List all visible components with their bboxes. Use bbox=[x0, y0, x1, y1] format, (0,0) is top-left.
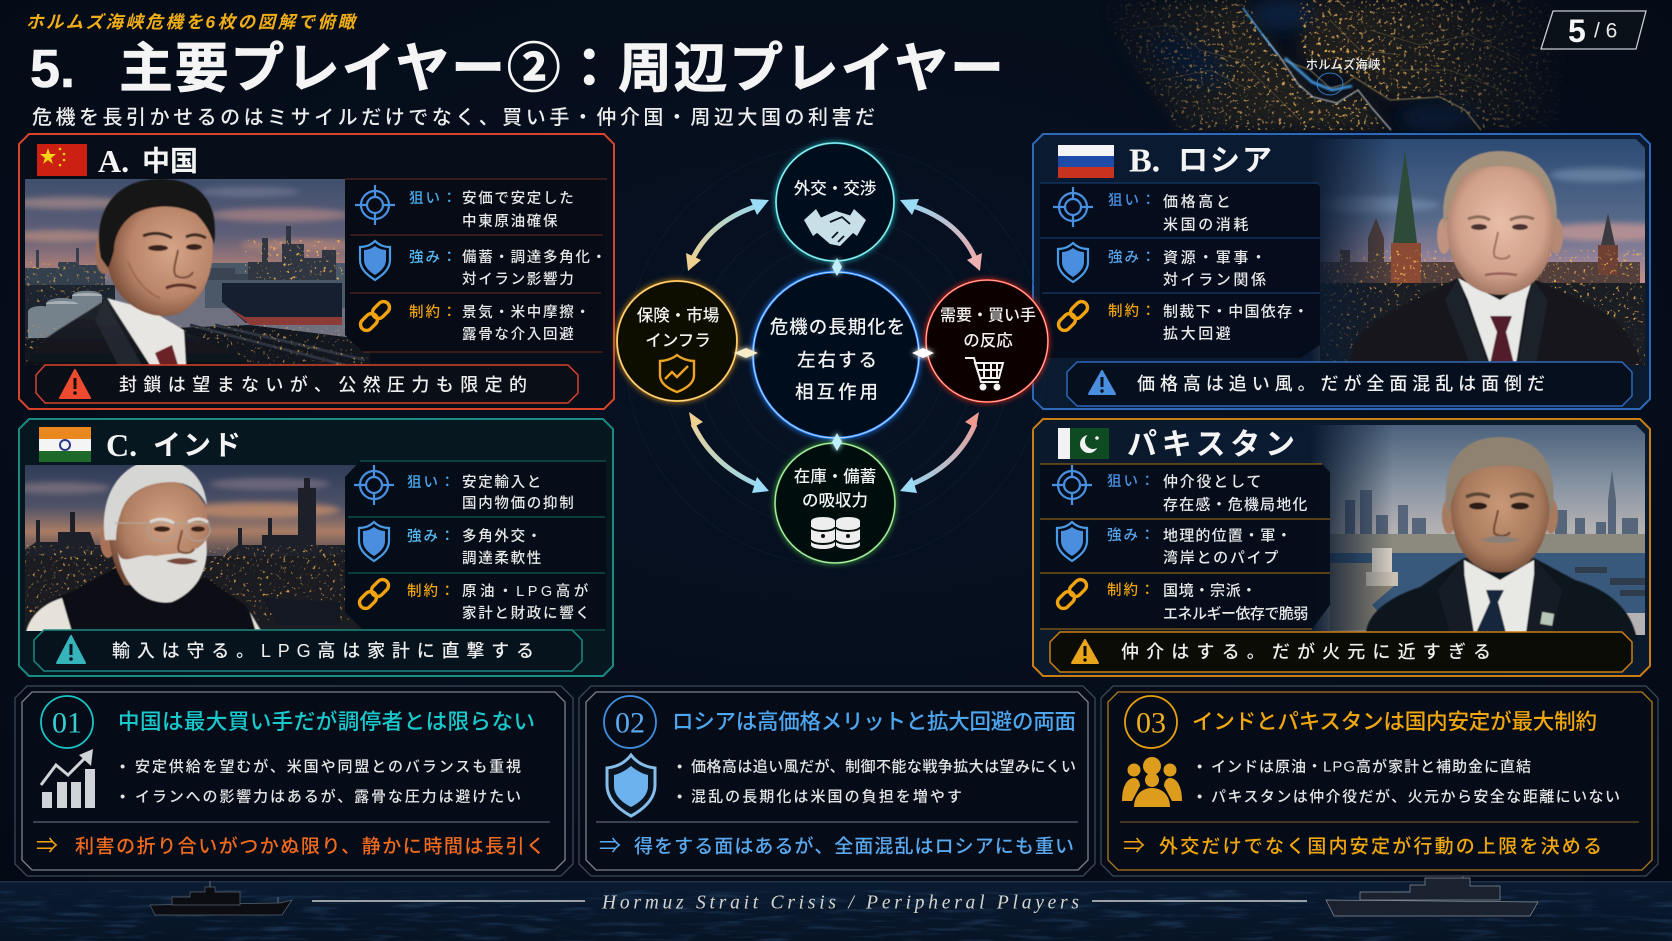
node: insurance and market: 保険・市場 bbox=[637, 306, 719, 325]
row: strength: 湾岸とのパイプ bbox=[1163, 550, 1281, 566]
row: strength: 備蓄・調達多角化・ bbox=[462, 248, 608, 266]
callout: Pakistan: 仲介はする。だが火元に近すぎる bbox=[1121, 641, 1491, 662]
callout: China: 封鎖は望まないが、公然圧力も限定的 bbox=[119, 374, 527, 395]
panel: A China bbox=[10, 134, 614, 409]
photo: harbour city scene with leader portrait bbox=[1312, 425, 1645, 640]
icon: rising chart bbox=[41, 749, 95, 808]
bullets: • bbox=[1197, 758, 1202, 776]
row: constraint bbox=[358, 299, 592, 343]
heading: C bbox=[106, 427, 241, 463]
row: constraint bbox=[1056, 299, 1311, 342]
card: takeaway 02 bbox=[579, 686, 1095, 876]
callout: Russia: 価格高は追い風。だが全面混乱は面倒だ bbox=[1137, 373, 1545, 394]
photo: India refinery scene with leader portrait bbox=[10, 460, 370, 632]
portrait: leader A bbox=[26, 179, 250, 365]
row: aim: 米国の消耗 bbox=[1163, 216, 1251, 234]
portrait: leader C bbox=[26, 460, 262, 632]
row: aim: 狙い： bbox=[1108, 192, 1158, 209]
row: aim: 狙い： bbox=[1107, 473, 1156, 490]
conclusion: 利害の折り合いがつかぬ限り、静かに時間は長引く bbox=[75, 836, 545, 858]
info panel: China bbox=[345, 179, 608, 352]
icon: handshake bbox=[804, 209, 866, 246]
row: strength bbox=[360, 241, 608, 288]
subtitle: 危機を長引かせるのはミサイルだけでなく、買い手・仲介国・周辺大国の利害だ bbox=[32, 106, 875, 129]
node: insurance and market: インフラ bbox=[645, 332, 711, 350]
arrow: top-left bbox=[686, 199, 769, 271]
row: strength: 強み： bbox=[1108, 249, 1158, 266]
row: strength: 対イラン影響力 bbox=[462, 271, 575, 288]
row: strength: 地理的位置・軍・ bbox=[1163, 528, 1294, 544]
row: constraint: 制約： bbox=[1107, 582, 1156, 599]
heading: C: インド bbox=[153, 430, 241, 460]
ship: left bbox=[150, 881, 292, 915]
diagram: interaction cycle bbox=[617, 143, 1048, 565]
row: aim bbox=[1053, 187, 1251, 234]
icon: cart bbox=[965, 358, 1003, 390]
row: aim bbox=[1052, 465, 1310, 514]
title: 主要プレイヤー②：周辺プレイヤー bbox=[119, 39, 1004, 99]
row: strength bbox=[1058, 243, 1269, 288]
row: constraint: 国境・宗派・ bbox=[1163, 582, 1259, 600]
heading: A: A. bbox=[98, 143, 129, 179]
info panel: Russia bbox=[1040, 183, 1320, 358]
panel: D Pakistan bbox=[1033, 419, 1650, 676]
bullets: 価格高は追い風だが、制御不能な戦争拡大は望みにくい bbox=[691, 758, 1076, 776]
row: constraint bbox=[357, 577, 592, 622]
node: center: 相互作用 bbox=[795, 382, 881, 402]
row: aim: 中東原油確保 bbox=[462, 213, 559, 230]
line: right bbox=[1092, 900, 1307, 902]
icon: barrels bbox=[811, 517, 860, 549]
row: constraint: 景気・米中摩擦・ bbox=[462, 303, 592, 321]
row: constraint: 制約： bbox=[1108, 303, 1158, 320]
row: aim: 国内物価の抑制 bbox=[462, 495, 575, 512]
node: demand: 需要・買い手 bbox=[940, 306, 1036, 324]
callout: Pakistan bbox=[1050, 632, 1632, 672]
heading: C: C. bbox=[106, 427, 137, 463]
row: aim: 狙い： bbox=[407, 474, 456, 491]
node: diplomacy bbox=[776, 143, 894, 261]
title: 5. bbox=[30, 39, 75, 99]
node: inventories bbox=[775, 443, 895, 563]
flag: Russia bbox=[1058, 145, 1114, 178]
bullets bbox=[120, 758, 521, 806]
bullets: パキスタンは仲介役だが、火元から安全な距離にいない bbox=[1211, 788, 1620, 806]
bullets bbox=[1197, 758, 1620, 806]
node: center: 危機の長期化を bbox=[770, 316, 906, 338]
icon: shield bbox=[607, 755, 655, 816]
row: constraint: 制約： bbox=[407, 583, 456, 600]
row: aim: 狙い： bbox=[409, 190, 458, 207]
row: strength: 強み： bbox=[1107, 527, 1156, 544]
conclusion: ⇒ bbox=[1123, 834, 1145, 858]
bullets: インドは原油・LPG高が家計と補助金に直結 bbox=[1211, 758, 1531, 776]
panel: B Russia bbox=[1033, 134, 1672, 409]
card: takeaway 01 bbox=[15, 686, 573, 876]
row: aim bbox=[355, 185, 575, 230]
flag: India bbox=[39, 427, 91, 462]
badge: 02 bbox=[615, 706, 645, 740]
badge: 03 bbox=[1136, 706, 1166, 740]
line: left bbox=[312, 900, 585, 902]
row: aim: 仲介役として bbox=[1163, 474, 1264, 490]
bullets bbox=[677, 758, 1076, 806]
callout: Russia bbox=[1067, 362, 1632, 406]
row: constraint: 原油・LPG高が bbox=[462, 582, 590, 600]
conclusion: ⇒ bbox=[599, 834, 621, 858]
bullets: イランへの影響力はあるが、露骨な圧力は避けたい bbox=[135, 788, 521, 806]
ship: right bbox=[1326, 875, 1538, 916]
row: constraint: 露骨な介入回避 bbox=[462, 326, 575, 343]
row: aim: 安定輸入と bbox=[462, 474, 543, 491]
row: constraint: エネルギー依存で脆弱 bbox=[1163, 604, 1311, 622]
node: inventories: 在庫・備蓄 bbox=[794, 467, 876, 486]
node: diplomacy: 外交・交渉 bbox=[794, 179, 877, 198]
bullets: 安定供給を望むが、米国や同盟とのバランスも重視 bbox=[135, 758, 521, 776]
row: constraint: 家計と財政に響く bbox=[462, 605, 592, 622]
badge bbox=[41, 696, 93, 748]
page badge bbox=[1541, 11, 1646, 49]
bullets: • bbox=[120, 758, 125, 776]
row: aim: 安価で安定した bbox=[462, 190, 575, 207]
callout: India bbox=[34, 630, 582, 671]
bullets: • bbox=[677, 758, 682, 776]
heading: B bbox=[1129, 142, 1272, 180]
badge: 01 bbox=[52, 706, 82, 740]
page badge: 5 bbox=[1568, 13, 1586, 49]
bullets: • bbox=[677, 788, 682, 806]
heading: インドとパキスタンは国内安定が最大制約 bbox=[1192, 710, 1597, 734]
heading: ロシアは高価格メリットと拡大回避の両面 bbox=[672, 710, 1076, 734]
conclusion: 外交だけでなく国内安定が行動の上限を決める bbox=[1159, 836, 1602, 858]
node: center: 左右する bbox=[797, 350, 879, 370]
arrow: bottom-right bbox=[900, 412, 979, 493]
page badge: / 6 bbox=[1594, 20, 1617, 42]
row: strength: 強み： bbox=[409, 249, 458, 266]
map label: ホルムズ海峡 bbox=[1306, 57, 1381, 72]
row: strength: 対イラン関係 bbox=[1163, 272, 1269, 288]
connector diamonds bbox=[734, 258, 934, 451]
heading: B: ロシア bbox=[1178, 144, 1272, 178]
row: strength: 資源・軍事・ bbox=[1163, 250, 1269, 266]
conclusion: 得をする面はあるが、全面混乱はロシアにも重い bbox=[634, 836, 1074, 858]
node: insurance and market bbox=[617, 281, 737, 401]
heading: A: 中国 bbox=[142, 146, 198, 176]
arrow: top-right bbox=[900, 199, 982, 271]
bullets: • bbox=[120, 788, 125, 806]
flag: Pakistan bbox=[1058, 428, 1109, 459]
badge bbox=[604, 696, 656, 748]
heading: B: B. bbox=[1129, 142, 1160, 180]
portrait: leader D bbox=[1366, 437, 1637, 640]
callout: China bbox=[36, 365, 578, 403]
photo: Kremlin scene with leader portrait bbox=[1314, 139, 1645, 365]
heading: 中国は最大買い手だが調停者とは限らない bbox=[118, 710, 535, 734]
row: strength: 強み： bbox=[407, 528, 456, 545]
heading: A bbox=[98, 143, 198, 179]
heading: Pakistan: パキスタン bbox=[1127, 428, 1295, 462]
flag: China bbox=[37, 144, 87, 176]
panel: C India bbox=[10, 419, 613, 676]
row: strength: 多角外交・ bbox=[462, 527, 543, 545]
row: strength bbox=[359, 522, 543, 567]
row: aim: 存在感・危機局地化 bbox=[1163, 496, 1310, 514]
kicker: ホルムズ海峡危機を6枚の図解で俯瞰 bbox=[26, 12, 358, 32]
map: Hormuz strait night map bbox=[1095, 0, 1570, 132]
bullets: 混乱の長期化は米国の負担を増やす bbox=[691, 788, 962, 806]
icon: people bbox=[1122, 757, 1182, 807]
row: strength bbox=[1057, 522, 1294, 566]
node: demand bbox=[926, 280, 1048, 402]
node: center bbox=[753, 272, 919, 438]
row: aim bbox=[354, 465, 575, 512]
footer band bbox=[0, 875, 1672, 941]
node: inventories: の吸収力 bbox=[802, 491, 868, 510]
photo: China oil port scene with leader portrait bbox=[10, 179, 370, 365]
bullets: • bbox=[1197, 788, 1202, 806]
row: constraint: 制約： bbox=[409, 304, 458, 321]
conclusion: ⇒ bbox=[36, 834, 58, 858]
arrow: bottom-left bbox=[689, 412, 769, 493]
info panel: Pakistan bbox=[1040, 464, 1330, 629]
card: takeaway 03 bbox=[1101, 686, 1658, 876]
node: demand: の反応 bbox=[963, 331, 1013, 350]
footer caption: Hormuz Strait Crisis / Peripheral Players bbox=[601, 892, 1079, 914]
row: constraint bbox=[1055, 577, 1311, 622]
callout: India: 輸入は守る。LPG高は家計に直撃する bbox=[112, 641, 534, 661]
row: aim: 価格高と bbox=[1163, 194, 1233, 210]
row: strength: 調達柔軟性 bbox=[462, 550, 543, 567]
info panel: India bbox=[345, 461, 606, 630]
portrait: leader B bbox=[1350, 151, 1641, 364]
icon: shield with chart bbox=[660, 355, 694, 392]
row: constraint: 制裁下・中国依存・ bbox=[1163, 304, 1311, 320]
row: constraint: 拡大回避 bbox=[1163, 326, 1233, 342]
badge bbox=[1125, 696, 1177, 748]
